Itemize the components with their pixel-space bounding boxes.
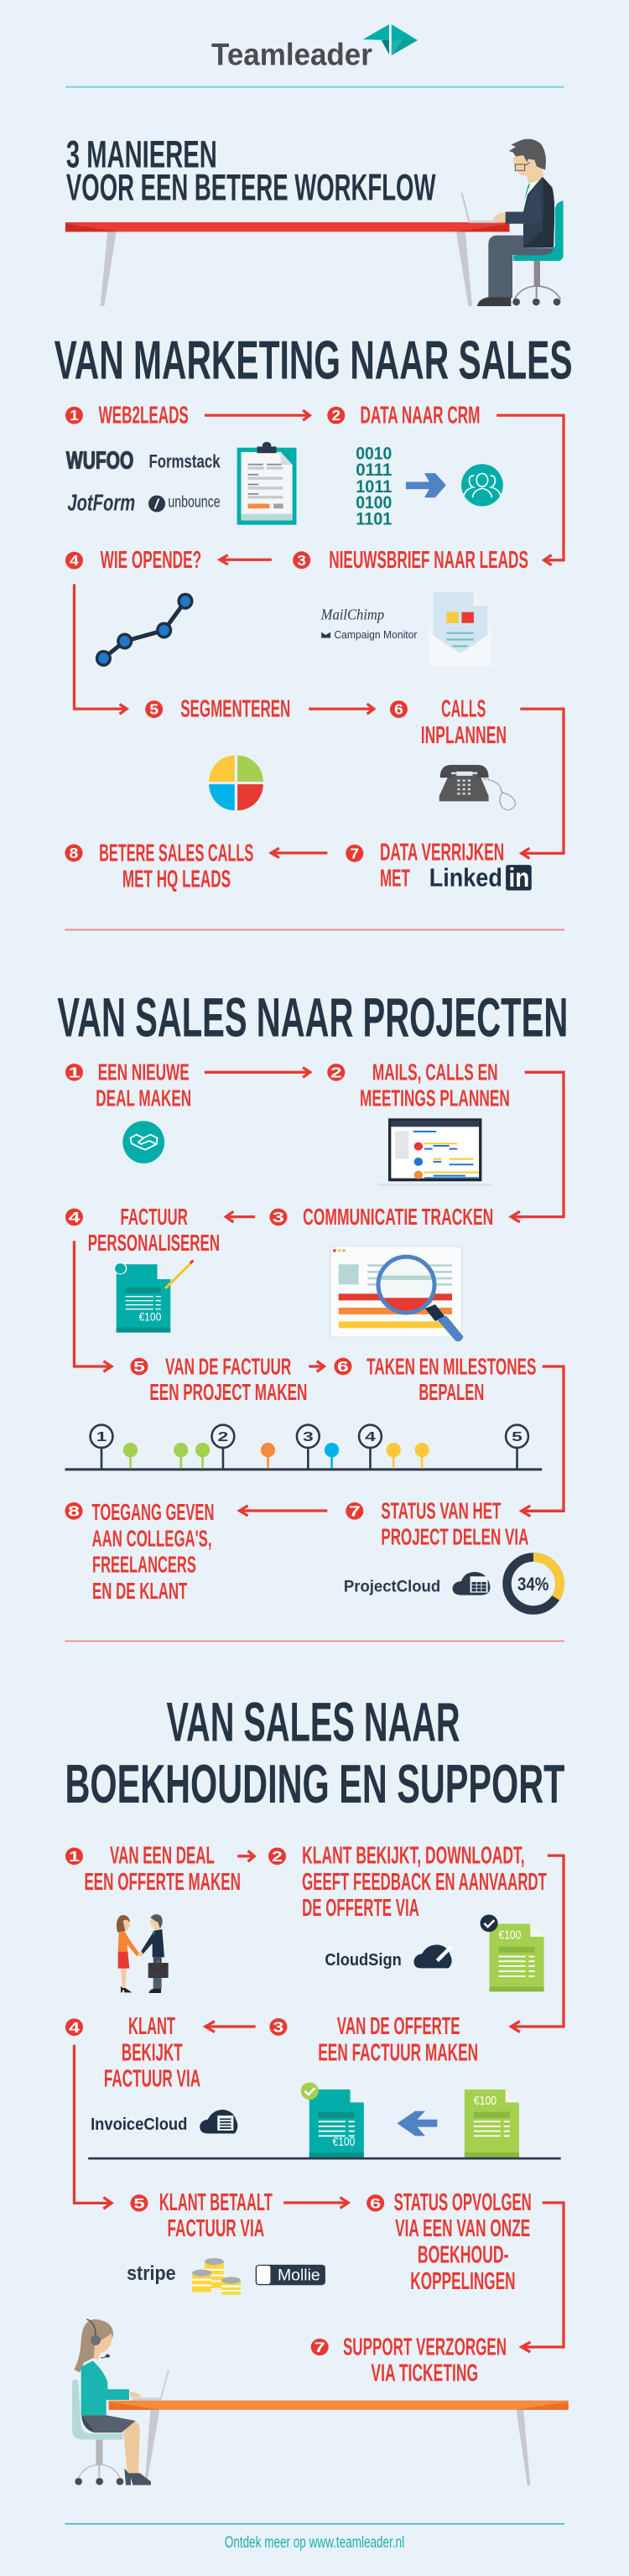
arrow 3 to 4 — [226, 1211, 255, 1222]
logo: InvoiceCloud: InvoiceCloud — [91, 2115, 187, 2134]
email tool logos: Campaign Monitor — [334, 629, 418, 641]
arrow 1 to 2 — [237, 1850, 254, 1861]
step 1: web2leads: WEB2LEADS — [99, 402, 189, 429]
icon: green quote document with check — [481, 1914, 544, 1991]
arrow 7 to 8 — [240, 1506, 327, 1516]
icon: team circle — [461, 464, 503, 507]
section 1: van marketing naar sales — [65, 402, 564, 930]
step 6: status opvolgen — [366, 2188, 532, 2294]
step 3: factuur maken: VAN DE OFFERTE — [337, 2013, 460, 2040]
step 8: toegang geven: EN DE KLANT — [92, 1579, 187, 1604]
step 1: offerte maken — [65, 1842, 241, 1896]
icon: newsletter envelope — [429, 592, 491, 665]
binary data: 1101 — [356, 508, 392, 528]
icon: telephone — [439, 765, 516, 810]
logo: stripe: stripe — [127, 2262, 175, 2284]
section 2 bottom: TOEGANG GEVEN — [92, 1500, 214, 1525]
logo: Teamleader: Teamleader — [211, 36, 372, 71]
icon: blue arrow — [406, 473, 446, 497]
step 6: calls inplannen — [390, 695, 507, 749]
section 2 bottom: AAN COLLEGA'S, — [92, 1526, 212, 1552]
chart: milestone timeline: 4 — [365, 1429, 376, 1444]
form tool logos: WUFOO — [66, 448, 133, 474]
step 1: web2leads — [65, 402, 189, 429]
step 2: mails calls meetings — [327, 1059, 510, 1111]
label: 34 percent: 34% — [517, 1574, 548, 1595]
step 1: nieuwe deal: 1 — [69, 1064, 80, 1080]
arrow 4 to 5 — [74, 1241, 112, 1371]
step 4: wie opende: 4 — [70, 552, 80, 569]
step 1: nieuwe deal — [65, 1059, 191, 1111]
arrow 7 to 8 — [271, 848, 327, 857]
section 3 bottom: KLANT BETAALT — [159, 2188, 273, 2215]
step 4: factuur personaliseren: 4 — [69, 1210, 80, 1226]
section 3 bottom: FACTUUR VIA — [167, 2215, 264, 2241]
step 4: klant bekijkt factuur: KLANT — [128, 2013, 175, 2040]
step 7: data verrijken met linkedin: Linked — [429, 863, 502, 892]
step 8: toegang geven — [65, 1500, 214, 1604]
chart: segment pie — [209, 756, 263, 810]
chart: milestone timeline: 1 — [96, 1429, 107, 1444]
arrow 5 to 6 — [309, 1361, 324, 1371]
chart: 34 percent donut — [507, 1557, 560, 1611]
binary data: 0111 — [356, 459, 392, 480]
step 8: toegang geven: 8 — [68, 1503, 80, 1519]
arrow 6 to 7 — [522, 2203, 564, 2352]
icon: green quote document with check: €100 — [499, 1928, 521, 1942]
step 3: nieuwsbrief — [293, 546, 528, 573]
section 3 top: boekhouding en support — [65, 1691, 564, 2157]
icon: handshake — [122, 1121, 164, 1163]
header and intro — [55, 24, 573, 391]
step 7: data verrijken met linkedin: 7 — [350, 845, 359, 861]
icon: teal invoice with pencil: €100 — [138, 1309, 161, 1324]
chart: milestone timeline: 2 — [218, 1429, 228, 1444]
step 8: betere sales calls: 8 — [70, 845, 78, 861]
arrow 6 to 7 — [520, 709, 564, 858]
step 6: status opvolgen: 6 — [370, 2196, 381, 2212]
icon: coins — [192, 2258, 241, 2295]
icon: teal invoice with pencil — [114, 1261, 194, 1333]
step 3: factuur maken — [269, 2013, 478, 2066]
icon: green invoice: €100 — [474, 2094, 496, 2107]
heading: sales to accounting and support — [65, 1691, 564, 1814]
illustration: browser with magnifier — [330, 1246, 463, 1341]
section 2 bottom: VAN DE FACTUUR — [165, 1354, 291, 1380]
step 2: mails calls meetings: 2 — [330, 1064, 342, 1080]
logo: Mollie: Mollie — [278, 2266, 320, 2284]
arrow 6 to 7 — [522, 1366, 564, 1517]
arrow 5 to 6 — [309, 704, 374, 714]
step 7: data verrijken met linkedin: MET — [380, 865, 410, 892]
step 3: communicatie tracken — [269, 1205, 493, 1230]
binary data — [356, 443, 392, 528]
form tool logos: Formstack — [148, 452, 221, 472]
step 2: klant bekijkt offerte: DE OFFERTE VIA — [302, 1895, 419, 1922]
step 5: segmenteren: 5 — [149, 700, 159, 717]
logo: Teamleader — [211, 24, 418, 71]
email tool logos: MailChimp — [320, 606, 384, 623]
arrow 2 to 3 — [511, 1072, 564, 1222]
section 2 top: van sales naar projecten: DEAL MAKEN — [96, 1085, 191, 1111]
title: 3 MANIEREN — [66, 133, 217, 175]
step 1: offerte maken: 1 — [69, 1850, 80, 1865]
illustration: two people shaking hands — [117, 1914, 169, 1993]
step 6: taken en milestones: 6 — [337, 1359, 349, 1375]
illustration: support woman with headset — [72, 2319, 169, 2485]
arrow 1 to 2 — [205, 1068, 310, 1077]
step 4: factuur personaliseren: FACTUUR — [120, 1205, 188, 1230]
step 7: status delen — [346, 1498, 528, 1550]
arrow 4 to 5 — [74, 2045, 112, 2209]
step 6: taken en milestones — [334, 1354, 536, 1405]
section 2 bottom — [65, 1241, 564, 1642]
step 5: factuur naar project — [130, 1354, 307, 1405]
step 3: factuur maken: 3 — [273, 2020, 283, 2036]
illustration: man at laptop — [462, 139, 564, 306]
step 6: status opvolgen: BOEKHOUD- — [418, 2241, 508, 2268]
icon: clipboard form — [237, 442, 296, 525]
footer link: Ontdek meer op www.teamleader.nl — [225, 2533, 404, 2551]
step 5: factuur naar project: 5 — [133, 1359, 145, 1375]
section 2 top: van sales naar projecten — [57, 986, 568, 1341]
step 4: wie opende — [65, 546, 201, 573]
step 7: support via ticketing — [311, 2334, 507, 2386]
step 4: klant bekijkt factuur — [65, 2013, 200, 2092]
step 4: klant bekijkt factuur: BEKIJKT — [122, 2039, 183, 2066]
illustration: red table — [65, 222, 509, 306]
step 2: klant bekijkt offerte: 2 — [272, 1850, 283, 1865]
step 6: calls inplannen: INPLANNEN — [421, 721, 507, 749]
step 4: klant bekijkt factuur: 4 — [69, 2020, 81, 2036]
step 7: data verrijken met linkedin: in — [508, 863, 529, 892]
step 2: data naar crm — [327, 402, 481, 429]
section 2 bottom: EEN PROJECT MAKEN — [149, 1380, 307, 1405]
illustration: laptop with planning — [377, 1118, 492, 1186]
arrow 5 to 6 — [283, 2198, 348, 2208]
email tool logos — [320, 606, 418, 641]
form tool logos — [66, 448, 221, 516]
step 4: factuur personaliseren — [65, 1205, 220, 1256]
arrow 2 to 3 — [511, 1855, 564, 2032]
binary data: 0010 — [356, 443, 392, 463]
step 4: wie opende: WIE OPENDE? — [101, 546, 201, 573]
step 3: communicatie tracken: 3 — [273, 1210, 284, 1226]
step 8: betere sales calls: MET HQ LEADS — [122, 866, 231, 892]
title — [66, 133, 436, 208]
binary data: 1011 — [356, 476, 392, 497]
chart: line with dots — [96, 593, 194, 667]
icon: blue arrow left — [398, 2111, 437, 2136]
section 2 top: van sales naar projecten: EEN NIEUWE — [98, 1059, 190, 1085]
chart: milestone timeline: 5 — [512, 1429, 522, 1444]
icon: teal invoice with check: €100 — [333, 2135, 355, 2148]
step 7: data verrijken met linkedin: DATA VERRIJKEN — [380, 839, 504, 866]
step 6: calls inplannen: CALLS — [441, 695, 486, 722]
section 3 top: boekhouding en support: FACTUUR VIA — [104, 2065, 200, 2092]
section 2 top: van sales naar projecten: PERSONALISEREN — [88, 1231, 220, 1256]
section 2 bottom: FREELANCERS — [92, 1552, 196, 1578]
arrow 3 to 4 — [220, 555, 272, 565]
step 1: offerte maken: VAN EEN DEAL — [110, 1842, 215, 1869]
logo: CloudSign: CloudSign — [325, 1951, 402, 1970]
step 5: klant betaalt: 5 — [133, 2196, 145, 2212]
illustration: orange table — [109, 2401, 569, 2485]
step 5: klant betaalt — [130, 2188, 273, 2241]
step 7: status delen: 7 — [349, 1503, 361, 1519]
step 5: segmenteren — [145, 695, 290, 722]
step 7: support via ticketing: 7 — [314, 2339, 325, 2355]
arrow 1 to 2 — [205, 410, 309, 420]
step 7: data verrijken met linkedin — [346, 839, 532, 892]
step 3: nieuwsbrief: 3 — [297, 552, 306, 569]
chart: milestone timeline — [65, 1425, 542, 1470]
binary data: 0100 — [356, 492, 392, 513]
section 3 bottom — [65, 2045, 569, 2551]
step 5: segmenteren: SEGMENTEREN — [180, 695, 290, 722]
form tool logos: unbounce — [168, 493, 221, 511]
icon: green invoice — [465, 2089, 519, 2157]
arrow 2 to 3 — [496, 415, 564, 565]
step 7: support via ticketing: VIA TICKETING — [371, 2360, 478, 2386]
section 3 top: boekhouding en support: EEN OFFERTE MAKEN — [84, 1868, 241, 1896]
step 2: data naar crm: 2 — [331, 407, 340, 424]
step 8: betere sales calls — [65, 840, 253, 892]
logo: ProjectCloud: ProjectCloud — [344, 1578, 440, 1595]
step 2: klant bekijkt offerte — [268, 1842, 547, 1922]
step 6: calls inplannen: 6 — [394, 700, 403, 717]
logo: Mollie — [256, 2265, 325, 2285]
icon: teal invoice with check — [301, 2082, 364, 2157]
step 6: taken en milestones: BEPALEN — [418, 1380, 484, 1405]
chart: milestone timeline: 3 — [303, 1429, 314, 1444]
arrow 3 to 4 — [205, 2022, 256, 2032]
step 8: betere sales calls: BETERE SALES CALLS — [99, 840, 253, 866]
arrow 4 to 5 — [74, 584, 127, 714]
step 1: web2leads: 1 — [70, 407, 79, 424]
step 2: data naar crm: DATA NAAR CRM — [361, 402, 481, 429]
form tool logos: JotForm — [67, 491, 135, 516]
logo: CloudSign — [325, 1944, 452, 1970]
